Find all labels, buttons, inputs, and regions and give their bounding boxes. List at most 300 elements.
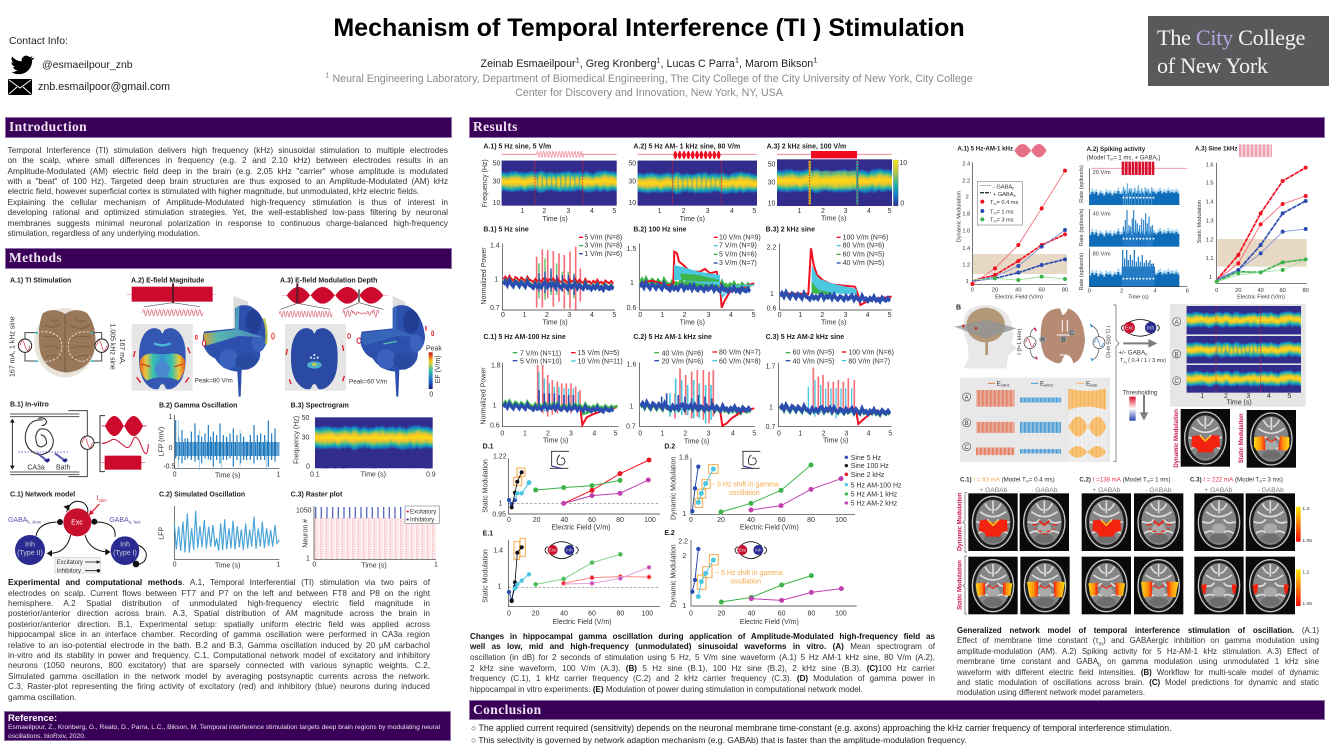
methods figures bottom row <box>8 491 439 574</box>
panel: C.1 model prediction 83 mA: + GABAb <box>979 487 1008 494</box>
panel: C.2 simulated oscillation <box>158 491 281 569</box>
panel: C.1 power 5 Hz AM 100 Hz: 1 <box>493 402 497 409</box>
panel: C.3 raster plot: Time (s) <box>361 562 387 569</box>
panel: B.1 normalized power 5 Hz sine: Normalized Power <box>481 247 488 305</box>
panel: C.2 simulated oscillation: 0 <box>173 562 177 569</box>
chart legend <box>845 455 902 508</box>
row labels and colour bars: 1.3 <box>1302 506 1309 512</box>
panel: A.3 static modulation vs field <box>1195 146 1309 301</box>
panel: A.3 static modulation vs field: Electric Field (V/m) <box>1237 295 1285 301</box>
panel: electric field waveforms: E <box>997 380 1001 387</box>
panel: A.2 spiking activity: ) <box>1159 155 1161 161</box>
chart legend: 5 Hz AM-2 kHz <box>851 501 898 508</box>
panel: C.1 power 5 Hz AM 100 Hz: 4 <box>592 430 596 437</box>
bracket and network inputs: m <box>1123 360 1127 364</box>
panel: C.3 power 5 Hz AM 2 kHz: 60 V/m (N=5) <box>793 350 834 357</box>
panel: C.2 power 5 Hz AM 1 kHz: 4 <box>731 430 735 437</box>
panel: B.1 normalized power 5 Hz sine: 1.4 <box>490 243 500 250</box>
panel: C.2 simulated oscillation: C.2) Simulated Oscillation <box>159 491 245 498</box>
panel: D.1 static modulation in vitro: 20 <box>533 517 541 524</box>
panel: electric field waveforms: stim1 <box>1001 383 1010 387</box>
panel: A.2 spiking activity: 0 <box>1088 289 1091 295</box>
row labels and colour bars: Dynamic Modulation <box>958 492 964 551</box>
panel: B.3 spectrogram: 0.9 <box>426 472 436 479</box>
panel: C.3 power 5 Hz AM 2 kHz <box>766 334 894 445</box>
panel: E.2 dynamic modulation model: 100 <box>835 610 847 617</box>
panel: C.1 model prediction 83 mA: = 0.4 ms) <box>1029 477 1055 484</box>
panel: electric field waveforms <box>960 378 1110 462</box>
panel: E.2 dynamic modulation model: 40 <box>747 610 755 617</box>
panel: A.1 spectrogram 5 Hz sine: 10 <box>493 200 501 207</box>
panel: D.2 dynamic modulation in vitro: Electric Field (V/m) <box>740 524 799 531</box>
panel: C.2 power 5 Hz AM 1 kHz: 1 <box>629 404 633 411</box>
panel: A.2 spectrogram 5 Hz AM 1 kHz: 4 <box>730 208 734 215</box>
text block: introduction: Explaining the cellular mechanism of Amplitude-Modulated high-frequency stimulation is thus of interest in <box>8 198 448 207</box>
panel: C.3 power 5 Hz AM 2 kHz: 1 <box>769 404 773 411</box>
panel: A.1 spectrogram 5 Hz sine: 4 <box>590 208 594 215</box>
panel: C.1 power 5 Hz AM 100 Hz: 10 V/m (N=11) <box>578 359 623 366</box>
panel: A.1 dynamic modulation vs field: b <box>1012 186 1014 190</box>
panel: B.3 normalized power 2 kHz sine: 5 <box>888 312 892 319</box>
heading: conclusion <box>469 700 1325 720</box>
panel: A.3 static modulation vs field: 1.3 <box>1206 218 1214 224</box>
panel: D.1 static modulation in vitro: 1.22 <box>493 453 507 460</box>
text block: results caption right: amplitude-modulation (AM). A.2) Spiking activity for 5 Hz-AM-1 kHz stimulation. A.3) Effect of <box>957 647 1319 656</box>
panel: B.2 gamma oscillation: 1 <box>277 472 281 479</box>
panel: B.3 normalized power 2 kHz sine: B.3) 2 kHz sine <box>766 227 815 234</box>
panel: A.1 dynamic modulation vs field: 0 <box>971 287 974 293</box>
panel: B.3 normalized power 2 kHz sine: 2.2 <box>767 244 776 251</box>
panel: C.1 power 5 Hz AM 100 Hz: C.1) 5 Hz AM-100 Hz sine <box>483 334 566 341</box>
panel: A.1 spectrogram 5 Hz sine <box>482 143 622 223</box>
panel: C.1 power 5 Hz AM 100 Hz: 7 V/m (N=11) <box>520 350 561 357</box>
panel: C.1 network model <box>8 491 146 574</box>
text block: results caption right: membrane time constant and GABAb on gamma modulation using unmodulated 1 kHz sine <box>957 657 1319 669</box>
panel: B.3 normalized power 2 kHz sine: 40 V/m (N=5) <box>843 260 884 267</box>
panel: B.1 normalized power 5 Hz sine: B.1) 5 Hz sine <box>483 227 529 234</box>
panel: C.1 network model: GABA <box>109 517 129 524</box>
panel: C.1 power 5 Hz AM 100 Hz: 0 <box>500 430 504 437</box>
text block: methods caption: hemisphere. A.2 Spatial distribution of unmodulated high-frequency electric field magnitude in <box>8 599 430 608</box>
panel: E.1 static modulation model: Exc <box>549 548 557 553</box>
panel: A.2 spiking activity: 4 <box>1153 289 1157 295</box>
heading: methods <box>5 248 452 269</box>
panel: C.3 model prediction 222 mA <box>1190 477 1295 614</box>
panel: A.1 dynamic modulation vs field: 1.4 <box>962 246 970 252</box>
panel: C.1 power 5 Hz AM 100 Hz: 3 <box>569 430 573 437</box>
panel: A.3 spectrogram 2 kHz sine: 5 <box>888 208 892 215</box>
panel: A.1 spectrogram 5 Hz sine: 2 <box>542 208 546 215</box>
panel: A.1 TI stimulation: 167 mA, 1 kHz sine <box>10 316 17 377</box>
panel: C.3 power 5 Hz AM 2 kHz: C.3) 5 Hz AM-2 kHz sine <box>766 334 844 341</box>
panel: B.1 normalized power 5 Hz sine: 5 <box>612 312 616 319</box>
panel: C.3 model prediction 222 mA: C.3) I = 222 mA (Model T <box>1190 477 1259 484</box>
panel: A.3 spectrogram 2 kHz sine: 3 <box>844 208 848 215</box>
panel: A.1 dynamic modulation vs field: m <box>993 211 997 215</box>
panel: A.3 spectrogram 2 kHz sine: 10 <box>899 160 907 167</box>
panel: A.3 E-field modulation depth: A.3) E-field Modulation Depth <box>280 278 377 285</box>
results figures C, D and E rows <box>481 334 902 626</box>
panel: B.1 normalized power 5 Hz sine: 3 <box>567 312 571 319</box>
chart legend: 5 Hz AM-1 kHz <box>851 492 898 499</box>
panel: D.2 dynamic modulation in vitro: Dynamic Modulation <box>671 457 678 520</box>
panel: B.2 gamma oscillation: -0.5 <box>163 463 175 470</box>
panel: B.3 spectrogram: Time (s) <box>361 472 386 479</box>
panel: electric field waveforms: total <box>1090 383 1097 387</box>
panel: A.1 TI stimulation: A.1) TI Stimulation <box>10 278 71 285</box>
panel: B.1 normalized power 5 Hz sine: 5 V/m (N=8) <box>584 235 622 242</box>
panel: B.2 normalized power 100 Hz sine: 10 V/m (N=9) <box>719 234 761 241</box>
panel: model spectrograms: B <box>1175 352 1179 358</box>
panel: B.1 normalized power 5 Hz sine: 1 <box>494 277 498 284</box>
panel: C.1 network model: (Type II) <box>17 550 43 557</box>
panel: C.2 power 5 Hz AM 1 kHz: 0.7 <box>626 423 636 430</box>
panel: A.3 static modulation vs field: 40 <box>1258 288 1264 294</box>
text block: methods caption: in-vitro and its stability in power and frequency. C.1, Computational network model of excitatory and inhibitory <box>8 651 430 660</box>
panel: A.1 dynamic modulation vs field: 1.2 <box>962 263 970 269</box>
panel: C.1 network model: Inh <box>25 542 35 549</box>
panel: C.2 power 5 Hz AM 1 kHz: 40 V/m (N=6) <box>662 350 703 357</box>
panel: B.3 normalized power 2 kHz sine: 0.6 <box>767 306 776 313</box>
panel: A.1 dynamic modulation vs field: T <box>990 209 993 215</box>
panel: A.3 static modulation vs field: 80 <box>1303 288 1309 294</box>
panel: B.1 normalized power 5 Hz sine: 4 <box>590 312 594 319</box>
panel: C.3 power 5 Hz AM 2 kHz: 1.7 <box>766 363 775 370</box>
panel: A.2 spiking activity: = 1 ms, + GABA <box>1113 155 1156 161</box>
panel: B.1 in-vitro: B.1) In-vitro <box>10 402 49 409</box>
panel: model spectrograms: C <box>1175 379 1180 385</box>
panel: C.1 network model: Excitatory <box>57 560 83 566</box>
panel: B.3 spectrogram: Frequency (Hz) <box>293 416 300 464</box>
logo background <box>1148 16 1329 86</box>
reference box: Reference: <box>8 713 57 724</box>
panel: B multi-scale workflow head and brain <box>954 304 1111 368</box>
row labels and colour bars <box>958 492 1312 614</box>
panel: C.1 power 5 Hz AM 100 Hz: 1 <box>523 430 527 437</box>
panel: B.2 normalized power 100 Hz sine: 2 <box>683 312 687 319</box>
panel: C.3 raster plot: 1 <box>306 556 310 563</box>
text block: methods caption: gamma oscillation. <box>8 693 76 702</box>
panel: A.3 static modulation vs field: 1.1 <box>1206 256 1214 262</box>
text block: conclusion point 1: ○ The applied current required (sensitivity) depends on the neuronal membrane time-constant (e.g. axons) approaching the kHz carrier frequency of temporal interference stimulation. <box>471 723 1172 733</box>
network model figures C row <box>958 477 1312 614</box>
panel: electric field waveforms: A <box>965 395 969 401</box>
heading: introduction <box>5 117 452 138</box>
panel: A.1 dynamic modulation vs field: Dynamic Modulation <box>956 191 962 242</box>
panel: D.2 dynamic modulation in vitro: oscillation <box>729 490 760 497</box>
panel: C.2 model prediction 138 mA: m <box>1147 480 1150 484</box>
panel: D.2 dynamic modulation in vitro: 60 <box>778 517 786 524</box>
panel: C.3 power 5 Hz AM 2 kHz: 40 V/m (N=5) <box>793 358 834 365</box>
panel: E.2 dynamic modulation model: 2.2 <box>678 538 688 545</box>
panel: A.2 spectrogram 5 Hz AM 1 kHz: 30 <box>628 179 636 186</box>
panel: C.2 power 5 Hz AM 1 kHz: 60 V/m (N=8) <box>719 358 761 365</box>
bracket and network inputs: Inh <box>1147 326 1154 332</box>
panel: B.1 normalized power 5 Hz sine: 1 V/m (N=6) <box>584 251 622 258</box>
panel: B.2 normalized power 100 Hz sine: 5 V/m (N=6) <box>719 251 757 258</box>
panel: D.1 static modulation in vitro: 0 <box>507 517 511 524</box>
panel: D.2 dynamic modulation in vitro: 1 <box>682 511 686 518</box>
chart legend: Sine 100 Hz <box>851 463 889 470</box>
affiliation <box>325 70 973 98</box>
panel: D.1 static modulation in vitro: 0.95 <box>492 512 506 519</box>
network model figures B row <box>954 303 1306 468</box>
panel: A.2 spiking activity: A.2) Spiking activity <box>1087 146 1146 153</box>
panel: C.2 model prediction 138 mA: + GABAb <box>1092 487 1121 494</box>
panel: E.2 dynamic modulation model: Inh <box>755 548 762 553</box>
panel: C.1 model prediction 83 mA: - GABAb <box>1031 487 1058 494</box>
text block: results caption left: 2 kHz sine waveform, 100 V/m (A.3). (B) 5 Hz sine (B.1), 100 Hz sine (B.2), 2 kHz sine (B.3). (C)100 Hz carrier <box>470 664 935 673</box>
panel: A.2 spectrogram 5 Hz AM 1 kHz: A.2) 5 Hz AM- 1 kHz sine, 80 V/m <box>633 143 740 150</box>
heading: results: Results <box>473 119 518 134</box>
panel: C.1 model prediction 83 mA <box>960 477 1070 614</box>
panel: D.2 dynamic modulation in vitro: D.2 <box>664 443 675 450</box>
panel: C.2 simulated oscillation: 1 <box>277 562 281 569</box>
text block: introduction: with a "beat" of 100 Hz). Targeted deep brain structures are thus exposed to an Amplitude-Modulated (AM) kHz <box>8 177 448 186</box>
text block: introduction: membranes suggests minimal neuronal polarization in response to continuous charge-balanced high-frequency <box>8 219 448 228</box>
panel: B.3 normalized power 2 kHz sine: Time (s) <box>821 319 846 326</box>
bracket and network inputs <box>1113 305 1166 462</box>
panel: B.3 normalized power 2 kHz sine: 60 V/m (N=5) <box>843 251 884 258</box>
panel: C.2 power 5 Hz AM 1 kHz: C.2) 5 Hz AM-1 kHz sine <box>633 334 712 341</box>
panel: B.3 spectrogram: B.3) Spectrogram <box>291 402 349 409</box>
panel: B.2 normalized power 100 Hz sine: 1 <box>630 280 634 287</box>
panel: B.3 normalized power 2 kHz sine: 100 V/m (N=6) <box>843 235 888 242</box>
panel: electric field waveforms: E <box>1086 380 1090 387</box>
panel: E.1 static modulation model: 0 <box>507 610 511 617</box>
panel: A.1 dynamic modulation vs field: + GABA <box>993 192 1014 198</box>
panel: A.3 static modulation vs field: 1.2 <box>1206 237 1214 243</box>
text block: methods caption: Simulated gamma oscillation in the network model by averaging postsynaptic currents across the network. <box>8 672 430 681</box>
panel: A.1 spectrogram 5 Hz sine: 50 <box>493 161 501 168</box>
panel: E.2 dynamic modulation model: 80 <box>807 610 815 617</box>
panel: B.3 spectrogram: 30 <box>302 434 310 441</box>
text block: results caption left <box>470 632 935 694</box>
panel: B.1 normalized power 5 Hz sine: 3 V/m (N=8) <box>584 243 622 250</box>
panel: C.3 raster plot: 0 <box>312 562 316 569</box>
panel: A.3 spectrogram 2 kHz sine: Time (s) <box>821 215 846 222</box>
panel: A.1 dynamic modulation vs field: 1 <box>966 279 969 285</box>
panel: B.1 normalized power 5 Hz sine: Time (s) <box>542 319 568 326</box>
panel: D.2 dynamic modulation in vitro: 100 <box>835 517 847 524</box>
text block: results caption right: and static modulation of oscillations across brain. (C) Model predictions for dynamic and static <box>957 678 1319 687</box>
panel: C.1 network model: b, slow <box>27 519 42 524</box>
panel: B.2 normalized power 100 Hz sine: 7 V/m (N=9) <box>719 243 757 250</box>
panel: C.1 power 5 Hz AM 100 Hz: 0.6 <box>490 423 500 430</box>
panel: E.1 static modulation model: E.1 <box>483 531 493 538</box>
panel: E.1 static modulation model: 20 <box>532 610 540 617</box>
title: Mechanism of Temporal Interference (TI ) Stimulation <box>333 14 965 42</box>
panel: A.1 dynamic modulation vs field: 1.6 <box>962 228 970 234</box>
panel: E.2 dynamic modulation model: 1 <box>682 603 686 610</box>
panel: C.1 power 5 Hz AM 100 Hz: 15 V/m (N=5) <box>578 350 619 357</box>
panel: C.2 model prediction 138 mA: - GABAb <box>1145 487 1172 494</box>
panel: A.2 E-field magnitude: Peak=80 V/m <box>195 378 233 385</box>
panel: model spectrograms: 4 <box>1267 393 1271 400</box>
text block: methods caption: posterior/anterior direction. B.1, Experimental setup: spatially uniform electric field was applied across <box>8 620 430 629</box>
panel: A.3 static modulation vs field: Static Modulation <box>1197 200 1203 243</box>
panel: A.2 spectrogram 5 Hz AM 1 kHz: 3 <box>706 208 710 215</box>
panel: B.3 normalized power 2 kHz sine: 80 V/m (N=6) <box>843 243 884 250</box>
panel: C.1 power 5 Hz AM 100 Hz: Normalized Power <box>481 367 488 425</box>
panel: E.1 static modulation model: 1 <box>498 584 502 591</box>
panel: A.1 TI stimulation: 1.005 kHz sine <box>109 324 116 370</box>
panel: C.3 power 5 Hz AM 2 kHz: 0 <box>777 430 781 437</box>
panel: A.2 spiking activity: 40 V/m <box>1093 212 1111 218</box>
panel: B.2 normalized power 100 Hz sine: B.2) 100 Hz sine <box>633 227 687 234</box>
panel: A.2 spectrogram 5 Hz AM 1 kHz: 10 <box>628 200 636 207</box>
text block: methods caption: relative to an iso-potential electrode in the bath. B.2 and B.3, Gamma oscillation induced by 20 μM carbachol <box>8 641 430 650</box>
panel: B.3 normalized power 2 kHz sine: 4 <box>866 312 870 319</box>
panel: model spectrograms: A <box>1175 320 1179 326</box>
panel: A.3 static modulation vs field: 1.6 <box>1206 162 1214 168</box>
panel: electric field waveforms: C <box>965 445 970 451</box>
panel: C.1 power 5 Hz AM 100 Hz <box>481 334 623 445</box>
panel: B.2 gamma oscillation <box>158 402 281 479</box>
panel: A.1 dynamic modulation vs field: 20 <box>992 287 998 293</box>
panel: D.1 static modulation in vitro: 1 <box>498 500 502 507</box>
panel: C.2 power 5 Hz AM 1 kHz: Time (s) <box>684 438 709 445</box>
panel: C.3 raster plot: C.3) Raster plot <box>291 491 343 498</box>
panel: A.3 static modulation vs field: 60 <box>1280 288 1286 294</box>
affiliation: Center for Discovery and Innovation, New York, NY, USA <box>515 86 783 98</box>
panel: B.2 normalized power 100 Hz sine: 5 <box>752 312 756 319</box>
panel: C.3 raster plot: 1050 <box>296 508 312 515</box>
panel: C.1 network model: Inhibitory <box>57 568 81 574</box>
panel: B.1 normalized power 5 Hz sine: 0.7 <box>490 305 500 312</box>
panel: C.2 power 5 Hz AM 1 kHz: 3 <box>707 430 711 437</box>
panel: E.2 dynamic modulation model: 20 <box>717 610 725 617</box>
panel: A.1 dynamic modulation vs field: = 0.4 ms <box>997 200 1019 206</box>
bracket and network inputs: Thresholding <box>1123 390 1157 396</box>
panel: A.2 spectrogram 5 Hz AM 1 kHz: Time (s) <box>680 216 705 223</box>
panel: E.1 static modulation model: 1.4 <box>493 547 503 554</box>
panel: E.2 dynamic modulation model: Exc <box>738 548 747 553</box>
panel: B.1 normalized power 5 Hz sine: 1 <box>523 312 527 319</box>
panel: C.3 raster plot: Neuron # <box>302 519 309 548</box>
text block: introduction: stimulation, regardless of any underlying modulation. <box>8 229 200 238</box>
panel: D.2 dynamic modulation in vitro: 0 <box>689 517 693 524</box>
panel: C.3 power 5 Hz AM 2 kHz: 1 <box>798 430 802 437</box>
text block: introduction: Amplitude-Modulated (AM) electric field deep in the brain (e.g. 2.05 kHz "carrier" whose amplitude is modulated <box>8 167 448 176</box>
panel: C.2 model prediction 138 mA: C.2) I =138 mA (Model T <box>1079 477 1147 484</box>
panel: A.2 spectrogram 5 Hz AM 1 kHz: 5 <box>752 208 756 215</box>
panel: A.1 dynamic modulation vs field: = 1 ms <box>997 209 1014 215</box>
contact heading: Contact Info: <box>9 36 68 47</box>
panel: A.1 TI stimulation <box>10 278 125 377</box>
panel: B.2 normalized power 100 Hz sine: 4 <box>729 312 733 319</box>
panel: C.2 power 5 Hz AM 1 kHz: 20 V/m (N=6) <box>662 358 703 365</box>
methods figures top row <box>10 278 442 479</box>
panel: E.2 dynamic modulation model: Electric Field (V/m) <box>740 619 799 626</box>
panel: C.1 network model: stim <box>99 498 107 503</box>
panel: A.2 spiking activity: 20 V/m <box>1093 170 1111 176</box>
text block: results caption right: modulation using different network model parameters. <box>957 688 1145 697</box>
panel: A.1 dynamic modulation vs field: 2.4 <box>962 162 970 168</box>
panel: B.2 normalized power 100 Hz sine: 3 <box>707 312 711 319</box>
heading: results <box>469 117 1325 138</box>
panel: E.1 static modulation model: Static Modulation <box>483 549 490 603</box>
panel: C.1 network model: I <box>97 495 99 502</box>
panel: B multi-scale workflow head and brain: I (f=1 kHz) <box>1017 328 1023 355</box>
panel: D.1 static modulation in vitro: Electric Field (V/m) <box>551 524 610 531</box>
panel: C.3 raster plot <box>291 491 439 569</box>
panel: C.2 model prediction 138 mA: = 1 ms) <box>1150 477 1171 484</box>
panel: C.2 simulated oscillation: Time (s) <box>215 562 240 569</box>
icon: twitter bird <box>11 56 34 74</box>
panel: C.1 network model: Exc <box>71 520 83 527</box>
panel: A.1 dynamic modulation vs field: - GABA <box>993 184 1012 190</box>
panel: A.3 spectrogram 2 kHz sine <box>767 143 907 222</box>
panel: B.3 normalized power 2 kHz sine: 0 <box>778 312 782 319</box>
panel: A.1 dynamic modulation vs field: 2.2 <box>962 178 970 184</box>
text block: results caption right: Effect of membrane time constant (τm) and GABAergic inhibition on gamma modulation using <box>957 636 1319 648</box>
panel: A.1 spectrogram 5 Hz sine: 1 <box>520 208 524 215</box>
bracket and network inputs: T <box>1120 358 1123 364</box>
panel: B.2 gamma oscillation: B.2) Gamma Oscillation <box>159 402 237 409</box>
panel: model spectrograms: 1 <box>1200 393 1204 400</box>
authors: Zeinab Esmaeilpour1, Greg Kronberg1, Lucas C Parra1, Marom Bikson1 <box>481 55 817 70</box>
panel: A.2 spectrogram 5 Hz AM 1 kHz: 2 <box>682 208 686 215</box>
panel: B.2 gamma oscillation: LFP (mV) <box>158 427 165 457</box>
panel: B multi-scale workflow head and brain: C <box>1070 331 1075 337</box>
text block: results caption right: Generalized network model of temporal interference stimulation of oscillation. (A.1) <box>957 626 1319 635</box>
text block: results caption left: well as low, mid and high-frequency (unmodulated) sinusoidal waveforms in vitro. (A) Mean spectrogram of <box>470 642 935 651</box>
panel: B.3 normalized power 2 kHz sine <box>766 227 892 326</box>
panel: B.3 spectrogram <box>291 402 438 479</box>
panel: D.1 static modulation in vitro: 100 <box>644 517 656 524</box>
panel: C.1 model prediction 83 mA: m <box>1026 480 1029 484</box>
panel: B.2 normalized power 100 Hz sine: 0.6 <box>627 305 636 312</box>
panel: A.3 static modulation vs field: 1.5 <box>1206 181 1214 187</box>
panel: C.2 power 5 Hz AM 1 kHz: 5 <box>752 430 756 437</box>
panel: A.1 dynamic modulation vs field: 40 <box>1015 287 1021 293</box>
panel: D.2 dynamic modulation in vitro: 1.8 <box>679 454 689 461</box>
panel: electric field waveforms: E <box>1040 380 1044 387</box>
text block: introduction: developing rational and optimized stimulation strategies. Yet, the well-established low-pass filtering by neuronal <box>8 208 448 217</box>
panel: model spectrograms: 5 <box>1287 393 1291 400</box>
text block: conclusion point 2: ○ This selectivity is governed by network adaption mechanism (e.g. GABAb) that is faster than the amplitude-modulation frequency. <box>471 735 967 745</box>
panel: C.3 model prediction 222 mA: - GABAb <box>1258 487 1284 494</box>
panel: A.3 spectrogram 2 kHz sine: 0 <box>900 201 904 208</box>
panel: A.2 spiking activity: 6 <box>1186 289 1189 295</box>
panel: E.2 dynamic modulation model: ~ 5 Hz shift in gamma <box>715 570 783 577</box>
chart legend: Sine 5 Hz <box>851 455 881 462</box>
panel: A.2 spiking activity: m <box>1110 157 1113 161</box>
panel: C.2 power 5 Hz AM 1 kHz <box>626 334 761 445</box>
panel: E.2 dynamic modulation model <box>664 530 857 626</box>
chart legend: Sine 2 kHz <box>851 472 885 479</box>
bracket and network inputs: ( 0.4 / 1 / 3 ms) <box>1127 358 1166 364</box>
panel: model spectrograms: 2 <box>1224 393 1228 400</box>
panel: C.2 simulated oscillation: LFP <box>158 527 165 540</box>
row labels and colour bars: 1.2 <box>1302 569 1309 575</box>
chart legend: 5 Hz AM-100 Hz <box>851 482 902 489</box>
panel: C.3 raster plot: Excitatory <box>410 510 436 516</box>
twitter handle: @esmaeilpour_znb <box>42 59 133 71</box>
panel: A.1 spectrogram 5 Hz sine: A.1) 5 Hz sine, 5 V/m <box>483 143 551 150</box>
panel: C.2 power 5 Hz AM 1 kHz: 1 <box>660 430 664 437</box>
heading: conclusion: Conclusion <box>473 702 542 717</box>
reference box <box>4 711 451 741</box>
panel: A.1 spectrogram 5 Hz sine: 30 <box>493 179 501 186</box>
panel: D.1 static modulation in vitro: D.1 <box>483 443 494 450</box>
panel: A.2 spiking activity: Rate (spikes/s) <box>1079 208 1085 246</box>
panel: E.1 static modulation model: 80 <box>616 610 624 617</box>
panel: B.2 normalized power 100 Hz sine: 0 <box>638 312 642 319</box>
network model figures A row <box>956 144 1309 301</box>
panel: E.1 static modulation model <box>483 531 660 626</box>
